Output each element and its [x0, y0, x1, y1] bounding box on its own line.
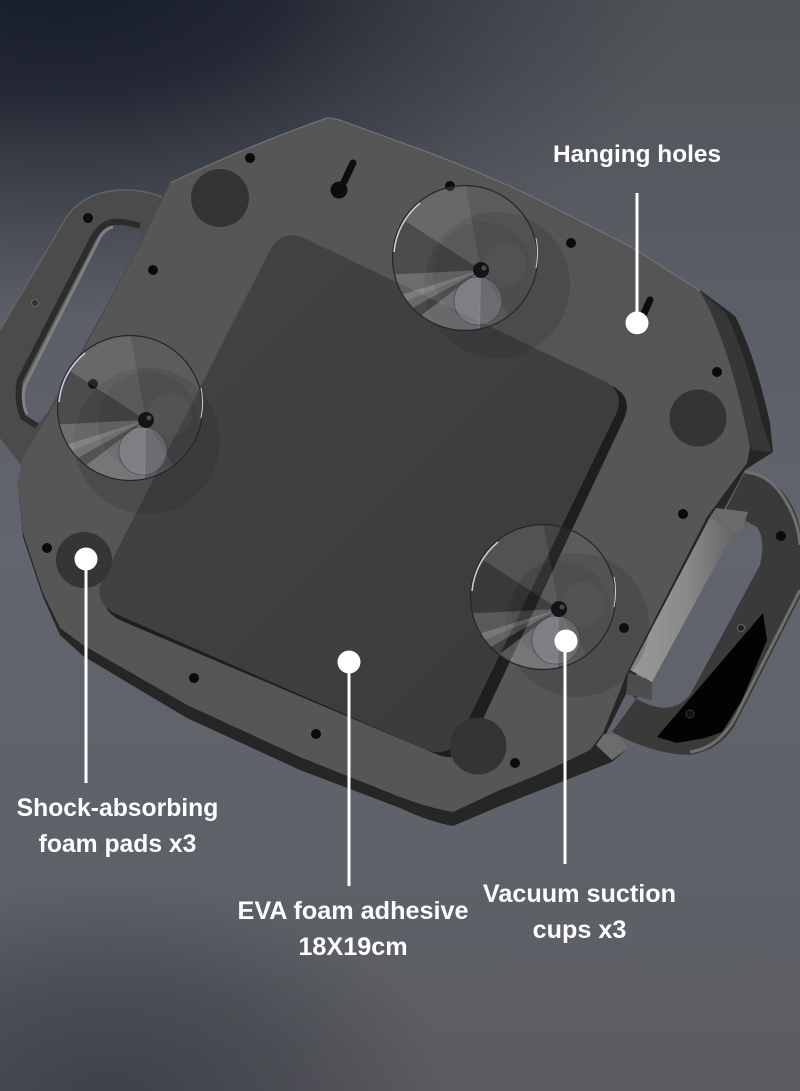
callout: shock-absorbing foam pads: foam pads x3: [39, 831, 196, 858]
foam pads: [56, 169, 726, 774]
main plate: [18, 118, 773, 826]
callout: hanging holes: Hanging holes: [553, 141, 721, 168]
mounting holes: [42, 153, 722, 768]
suction cup shadows: [74, 212, 649, 697]
callout: vacuum suction cups: Vacuum suction: [483, 880, 676, 908]
plate bevel: [18, 290, 773, 826]
handle screw holes: [686, 531, 786, 718]
handle black cutout: [657, 613, 767, 743]
callout: shock-absorbing foam pads: Shock-absorbing: [17, 795, 218, 822]
hanging keyhole right: [626, 300, 650, 335]
callout: EVA foam adhesive: 18X19cm: [298, 933, 408, 961]
suction cup right: [458, 512, 616, 682]
suction cup top: [380, 173, 538, 343]
suction cup left: [45, 323, 203, 493]
callout: hanging holes: [553, 141, 721, 334]
handle metal bar: [626, 508, 748, 700]
callout: EVA foam adhesive: EVA foam adhesive: [238, 897, 468, 925]
EVA foam adhesive pad: [100, 235, 627, 757]
left handle: [0, 190, 162, 466]
hanging keyhole left: [330, 163, 353, 198]
right handle: [612, 472, 800, 755]
callout: vacuum suction cups: cups x3: [533, 916, 626, 944]
callout: EVA foam adhesive: [238, 650, 468, 961]
callout: vacuum suction cups: [483, 630, 676, 944]
callout: shock-absorbing foam pads: [17, 548, 218, 858]
handle screw holes: [32, 213, 93, 306]
